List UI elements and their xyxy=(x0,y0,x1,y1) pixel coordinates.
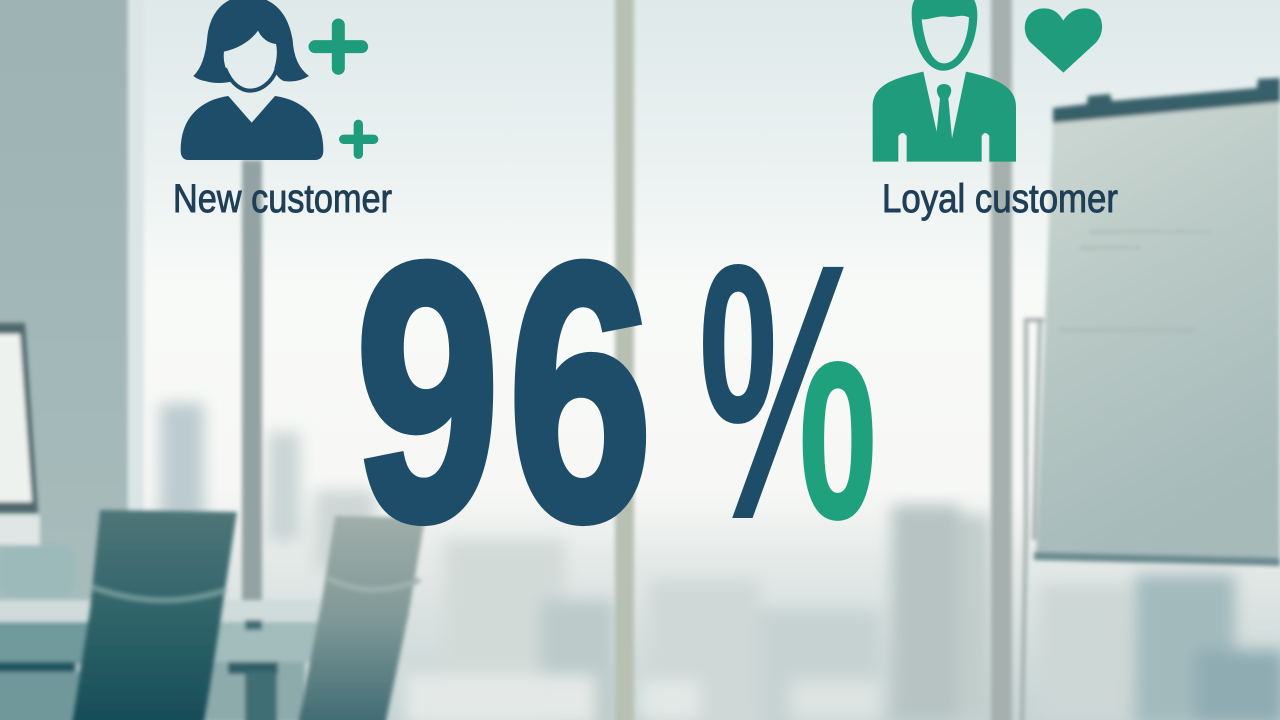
headline figure: 96% xyxy=(356,188,878,596)
woman hair xyxy=(193,0,309,83)
wall xyxy=(0,0,144,720)
desk xyxy=(0,515,325,720)
percent sign: % xyxy=(698,189,878,596)
man hair and face ring xyxy=(912,0,977,71)
icon: woman with plus signs xyxy=(181,0,374,160)
new customer group xyxy=(173,0,392,221)
loyal customer group xyxy=(873,0,1118,221)
chairs xyxy=(72,510,425,720)
large plus xyxy=(315,25,362,68)
woman body xyxy=(181,96,323,160)
number 96: 96 xyxy=(356,188,661,596)
man suit xyxy=(873,72,1016,162)
icon: man with heart xyxy=(873,0,1102,162)
label: loyal customer: Loyal customer xyxy=(882,177,1118,221)
heart xyxy=(1025,8,1102,73)
label: new customer: New customer xyxy=(173,177,392,221)
woman neck ring xyxy=(225,68,277,91)
skyline xyxy=(160,403,1280,720)
whiteboard xyxy=(1022,78,1280,720)
mullions xyxy=(242,0,1012,720)
small plus xyxy=(344,124,374,154)
monitor xyxy=(0,323,38,513)
